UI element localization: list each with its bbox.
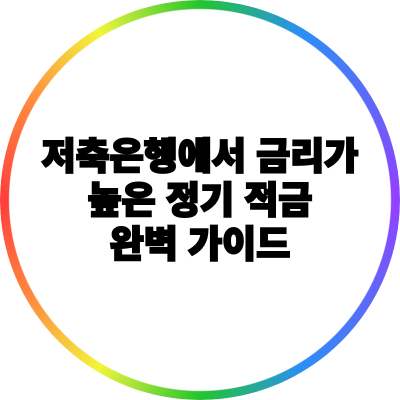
title: 완벽 가이드 [110, 224, 290, 265]
title: 높은 정기 적금 [88, 180, 312, 221]
title: 저축은행에서 금리가 [42, 136, 358, 177]
